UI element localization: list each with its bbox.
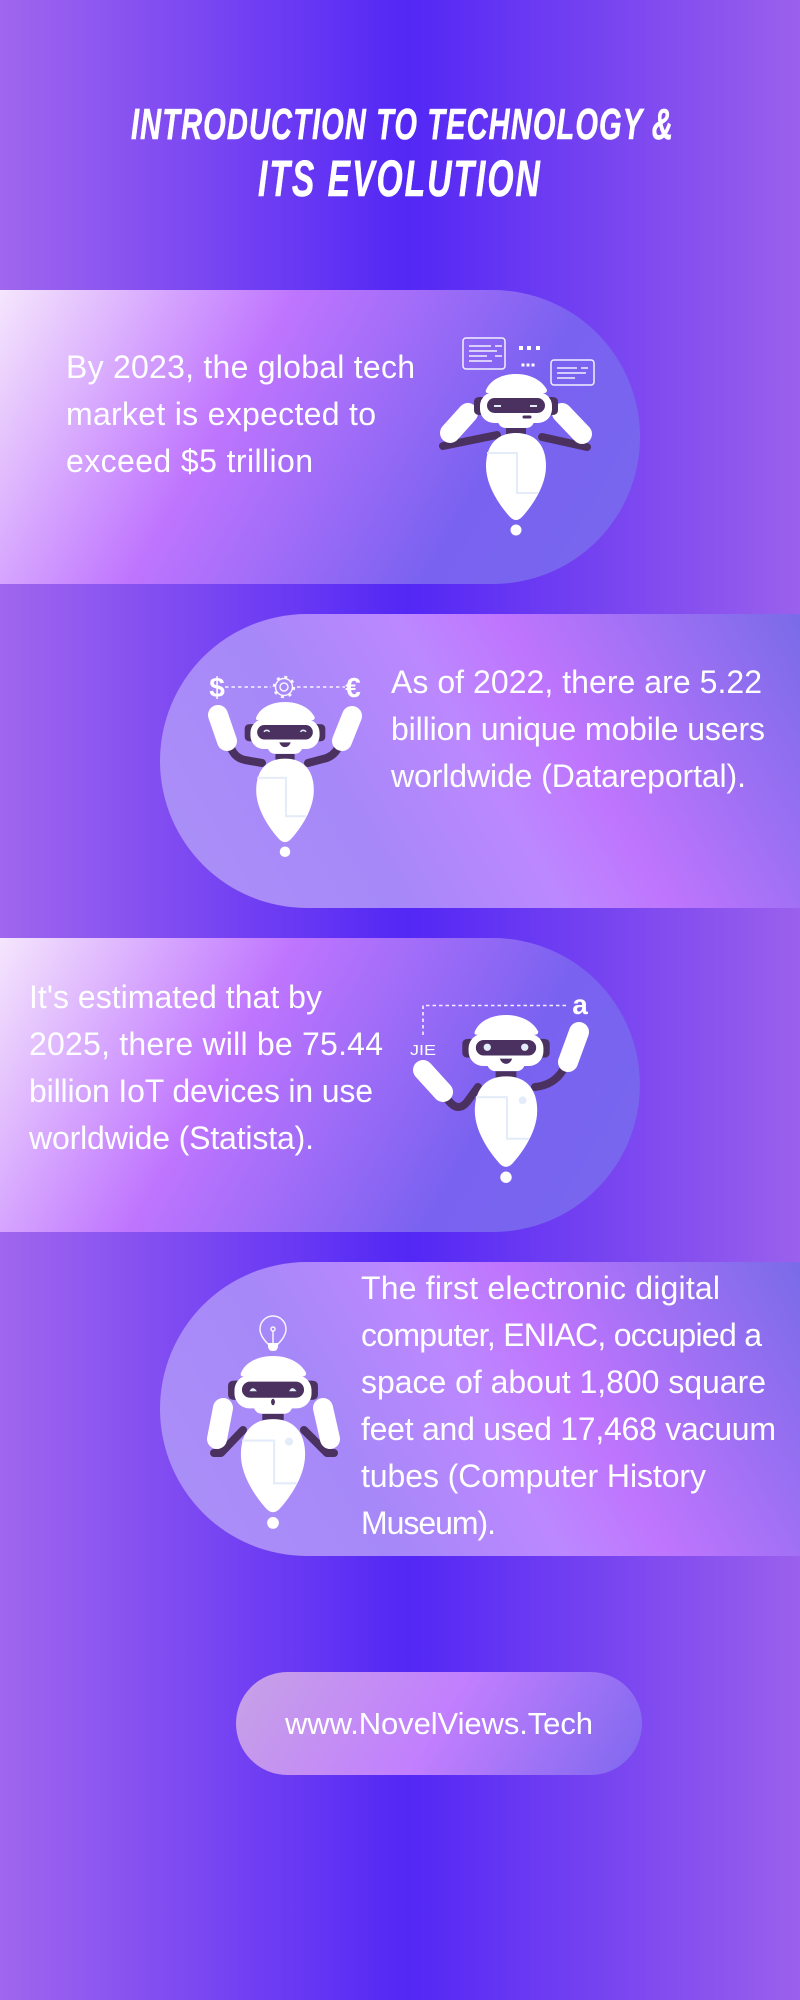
text: mobile users: worldwide (Datareportal). bbox=[390, 758, 746, 794]
text: IoT devices: It's estimated that by bbox=[29, 979, 322, 1015]
icon: robot with light bulb bbox=[214, 1316, 334, 1529]
text: tech market: By 2023, the global tech bbox=[66, 349, 415, 385]
text: mobile users bbox=[390, 664, 765, 794]
icon: robot with translation: JIE bbox=[410, 1042, 436, 1059]
text: IoT devices bbox=[28, 979, 383, 1156]
text: ENIAC: The first electronic digital bbox=[361, 1270, 720, 1306]
icon: robot with documents bbox=[443, 338, 594, 536]
title: ITS EVOLUTION bbox=[258, 151, 540, 208]
panel: IoT devices bbox=[0, 938, 640, 1232]
text: IoT devices: worldwide (Statista). bbox=[28, 1120, 314, 1156]
text: IoT devices: 2025, there will be 75.44 bbox=[29, 1026, 383, 1062]
text: ENIAC: tubes (Computer History bbox=[361, 1458, 706, 1494]
text: ENIAC bbox=[361, 1270, 776, 1541]
panel: ENIAC bbox=[160, 1262, 800, 1556]
text: ENIAC: computer, ENIAC, occupied a bbox=[361, 1317, 762, 1353]
icon: robot with currency: $ bbox=[209, 672, 225, 703]
text: mobile users: As of 2022, there are 5.22 bbox=[391, 664, 762, 700]
text: tech market bbox=[66, 349, 415, 479]
text: ENIAC: feet and used 17,468 vacuum bbox=[361, 1411, 776, 1447]
title: INTRODUCTION TO TECHNOLOGY & bbox=[131, 99, 673, 148]
icon: robot with translation: a bbox=[572, 989, 588, 1020]
icon: robot with currency bbox=[209, 672, 361, 857]
text: tech market: market is expected to bbox=[66, 396, 376, 432]
text: tech market: exceed $5 trillion bbox=[66, 443, 313, 479]
text: ENIAC: Museum). bbox=[361, 1505, 496, 1541]
title bbox=[131, 99, 673, 208]
text: ENIAC: space of about 1,800 square bbox=[361, 1364, 766, 1400]
website pill bbox=[236, 1672, 642, 1775]
panel: mobile users bbox=[160, 614, 800, 908]
website pill: www.NovelViews.Tech bbox=[284, 1706, 593, 1741]
text: mobile users: billion unique mobile users bbox=[391, 711, 765, 747]
text: IoT devices: billion IoT devices in use bbox=[29, 1073, 373, 1109]
icon: robot with translation bbox=[410, 989, 588, 1183]
panel: tech market bbox=[0, 290, 640, 584]
icon: robot with currency: € bbox=[345, 672, 361, 703]
